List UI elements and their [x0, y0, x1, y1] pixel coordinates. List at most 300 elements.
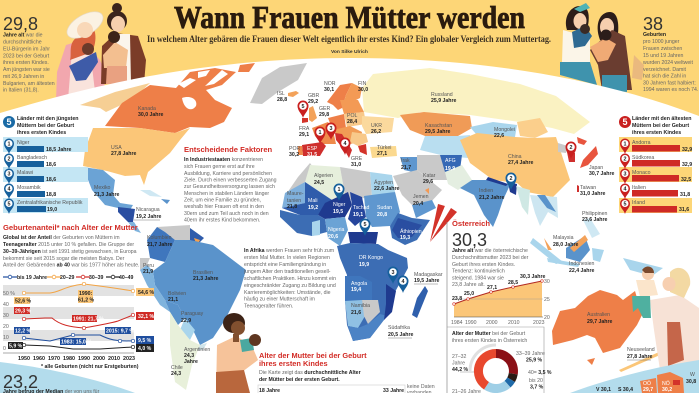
Australia and New Zealand — [552, 290, 660, 372]
heading: map key: der Mütter bei der ersten Geburt. — [259, 377, 340, 383]
map labels: 22,6 — [494, 133, 504, 139]
ranking: oldest mothers: 2 — [624, 156, 626, 162]
map labels: Mongolei — [494, 127, 515, 133]
chart legend: 20–29 — [60, 275, 75, 281]
ranking: oldest mothers: 4 — [624, 186, 626, 192]
ranking: oldest mothers: Monaco — [632, 170, 651, 176]
chart legend: 30–39 — [89, 275, 104, 281]
map labels: Äthiopien — [400, 228, 422, 235]
text block: In Afrika: Teenageralter führen. — [244, 304, 293, 310]
map labels: Chile — [171, 365, 183, 371]
map: Austria on bottom-right arc: 30,2 — [662, 387, 672, 393]
map labels: Japan — [589, 165, 603, 171]
ranking: oldest mothers: 5 — [622, 117, 628, 127]
map labels: 25,9 Jahre — [431, 98, 456, 104]
map labels: Namibia — [351, 303, 370, 309]
line chart: share of births by age: 54,6 % — [138, 290, 155, 296]
text block: Geburtenanteil — [3, 223, 139, 268]
map labels: Türkei — [377, 145, 391, 151]
donut chart box: 3,7 % — [530, 384, 544, 390]
text block: Entscheidende Faktoren: Ausbildung, Karriere und persönlichen — [184, 171, 272, 177]
illustration: two mothers with babies, left — [56, 3, 146, 100]
line chart: share of births by age: 10 — [3, 335, 9, 341]
stat: 38: 1994 waren es noch 74. — [643, 87, 698, 93]
map labels: Algerien — [314, 173, 333, 179]
stat: 29,8: 2023 bei der Geburt — [3, 54, 50, 60]
ranking: oldest mothers: Südkorea — [632, 155, 654, 161]
ranking: youngest mothers: Länder mit den jüngsten — [17, 116, 79, 122]
map: Austria on bottom-right arc: 30,8 — [686, 379, 696, 385]
map legend: keine Daten — [407, 384, 435, 390]
ranking: youngest mothers: 18,8 — [46, 192, 56, 198]
panel: Österreich: Jahre alt war die österreichische — [452, 248, 528, 254]
map labels: ISL — [277, 91, 285, 97]
map labels: 30,7 Jahre — [589, 171, 614, 177]
map labels: Paraguay — [181, 311, 204, 317]
map labels: 27,1 — [377, 151, 387, 157]
area chart: age of Austrian mothers: 28,5 — [508, 280, 518, 286]
text block: Geburtenanteil: 30–39-Jährigen ist seit 1991 stetig gewachsen, in Europa — [3, 249, 137, 255]
map labels: GRE — [351, 156, 363, 162]
map pins: 3 — [330, 126, 332, 132]
text block: Entscheidende Faktoren: Menschen in stabilen Ländern länger — [184, 191, 269, 197]
map labels: Indien — [479, 188, 493, 194]
text block: In Afrika: jungem Alter den traditionellen gesell- — [243, 269, 331, 275]
line chart: share of births by age: 12,2 % — [15, 328, 32, 334]
text block: In Afrika: eingeschränkter Zugang zu Bildung und — [244, 283, 336, 289]
map labels: 30,1 — [324, 87, 334, 93]
ranking: oldest mothers: 32,9 — [682, 162, 692, 168]
map labels: Jemen — [413, 194, 429, 200]
map labels: 19,2 — [308, 205, 318, 211]
stat: 29,8: Bulgarien, am ältesten — [3, 81, 55, 87]
text block: In Afrika — [243, 248, 336, 310]
map labels: 21,2 Jahre — [479, 195, 504, 201]
map: Austria on bottom-right arc: W — [690, 372, 695, 378]
stat: 29,8: Am jüngsten war sie — [3, 67, 50, 73]
stat: 29,8: 29,8 — [3, 14, 38, 34]
line chart: share of births by age: 2010 — [108, 356, 120, 362]
map labels: 27,8 Jahre — [627, 354, 652, 360]
map pins: 2 — [570, 145, 572, 151]
map labels: Angola — [351, 281, 367, 287]
map labels: 24,5 — [314, 180, 324, 186]
text block: Entscheidende Faktoren: zur Gesundheitsversorgung lassen sich — [184, 184, 275, 190]
map labels: 29,6 — [423, 179, 433, 185]
map labels: ESP — [307, 146, 318, 152]
line chart: share of births by age: 2000 — [93, 356, 105, 362]
map labels: Mali — [308, 198, 318, 204]
ranking: youngest mothers: 2 — [8, 156, 10, 162]
map labels: 21,1 — [168, 297, 178, 303]
map labels: POL — [347, 113, 357, 119]
ranking: youngest mothers: 19,0 — [47, 207, 57, 213]
map labels: Südafrika — [388, 325, 410, 331]
map labels: Nicaragua — [136, 207, 160, 213]
map labels: 21,7 — [401, 165, 411, 171]
map labels: 20,5 Jahre — [388, 332, 413, 338]
ranking: youngest mothers — [3, 116, 88, 214]
byline: Von Silke Ulrich — [331, 49, 368, 55]
ranking: oldest mothers: Müttern bei der Geburt — [632, 123, 689, 129]
map labels: Tschad — [353, 205, 370, 211]
text block: Geburtenanteil: Teenageralter 2015 unter 10 % gefallen. Die Gruppe der — [3, 242, 134, 248]
heading: map key: Die Karte zeigt das durchschnittliche Alter — [259, 370, 361, 376]
map labels: 30,0 — [358, 87, 368, 93]
map labels: 22,9 — [181, 318, 191, 324]
bottom left sky arc — [0, 362, 135, 393]
ranking: oldest mothers: 3 — [624, 172, 626, 178]
area chart: age of Austrian mothers: 2010 — [508, 320, 520, 326]
text block: Entscheidende Faktoren: sich Frauen gerne erst auf ihre — [184, 164, 255, 170]
text block: Geburtenanteil: Anteil der Gebärenden ab 40 war bis 1977 höher als heute. — [3, 262, 139, 268]
map labels: Kolumbien — [147, 235, 172, 241]
map labels: 24,3 — [184, 353, 194, 359]
map labels: 28,0 Jahre — [553, 242, 578, 248]
map labels: UKR — [371, 123, 382, 129]
ranking: oldest mothers: 1 — [624, 142, 626, 148]
line chart: share of births by age: 32,1 % — [138, 314, 155, 320]
map labels: GBR — [308, 93, 319, 99]
donut chart box: 33–39 Jahre — [516, 351, 545, 357]
stat: 38 — [643, 14, 698, 93]
text block: Geburtenanteil: Geburtenanteil* nach Alter der Mutter — [3, 223, 138, 232]
map labels: Mexiko — [94, 185, 111, 191]
map pins — [298, 100, 576, 293]
line chart: share of births by age: 30 — [3, 313, 9, 319]
line chart: share of births by age: 5,9 % — [9, 344, 23, 350]
chart legend: 40–49 — [119, 275, 134, 281]
map labels: 21,3 Jahre — [94, 192, 119, 198]
map labels: 19,9 — [359, 262, 369, 268]
donut chart box: ihres ersten Kindes in Österreich — [452, 337, 527, 344]
line chart: share of births by age: 9,5 % — [138, 338, 152, 344]
text block: In Afrika: entspricht eine Familiengründung in — [244, 262, 326, 268]
ranking: youngest mothers: 18,6 — [46, 177, 56, 183]
map: Austria on bottom-right arc: V 30,1 — [596, 387, 611, 393]
line chart: share of births by age: 1990 — [78, 356, 90, 362]
panel: Österreich: Durchschnittsmutter 2023 bei der — [452, 255, 529, 261]
map labels: Kasachstan — [425, 123, 452, 129]
stat: 38: Frauen zwischen — [643, 46, 682, 52]
map legend — [258, 384, 435, 393]
stat: 38: verzeichnet. Damit — [643, 67, 687, 73]
map labels: 26,2 — [371, 129, 381, 135]
text block: Entscheidende Faktoren — [184, 145, 277, 224]
line chart: share of births by age: 1980 — [63, 356, 75, 362]
map labels: 21,8 — [287, 204, 297, 210]
stat: 29,8: durchschnittliche — [3, 40, 42, 46]
map labels: Australien — [587, 312, 610, 318]
map labels: Bolivien — [168, 291, 186, 297]
line chart: share of births by age: 1990: — [79, 291, 93, 297]
panel: Österreich: Österreich — [452, 219, 490, 228]
donut chart box: 44,2 % — [452, 367, 469, 373]
map labels: Madagaskar — [414, 272, 443, 278]
text block: Geburtenanteil: bekommt sie seit 2015 sogar die meisten Babys. Der — [3, 256, 125, 262]
map: Austria on bottom-right arc: NÖ — [662, 380, 670, 387]
ranking: youngest mothers: Malawi — [17, 170, 33, 176]
stat: 38: 30 Jahren fast halbiert: — [643, 80, 696, 86]
map labels: 28,8 — [277, 97, 287, 103]
text block: Entscheidende Faktoren: Zeit, um eine Familie zu gründen, — [184, 198, 261, 204]
map labels: Argentinien — [184, 347, 210, 353]
subtitle: In welchem Alter gebären die Frauen dieser Welt eigentlich ihr erstes Kind? Ein globaler Vergleich zum Muttertag. — [147, 34, 551, 44]
map labels: 31,0 Jahre — [580, 191, 605, 197]
map labels: FIN — [358, 81, 367, 87]
map pins: 5 — [364, 222, 366, 228]
ranking: youngest mothers: Mosambik — [17, 185, 41, 191]
map pins: 2 — [510, 176, 512, 182]
area chart: age of Austrian mothers: 2000 — [486, 320, 498, 326]
area chart: age of Austrian mothers: 23,8 — [452, 296, 462, 302]
ranking: oldest mothers: Italien — [632, 185, 646, 191]
map labels: 31,0 — [351, 162, 361, 168]
ranking: oldest mothers: Irland — [632, 200, 645, 206]
map: Austria on bottom-right arc: S 30,4 — [618, 387, 633, 393]
heading: map key: Alter der Mutter bei der Geburt — [259, 351, 367, 360]
map labels: Irak — [401, 158, 410, 164]
ranking: youngest mothers: Müttern bei der Geburt — [17, 123, 74, 129]
line chart: share of births by age: 2015: 9,7 % — [106, 328, 134, 334]
text block: In Afrika: häufig zu einer Mutterschaft im — [244, 296, 315, 302]
map labels: 19,5 Jahre — [414, 278, 439, 284]
map labels: USA — [111, 145, 122, 151]
ranking: youngest mothers: Bangladesch — [17, 155, 47, 161]
stat: 29,8: in Italien (31,8). — [3, 88, 39, 94]
illustration: mother lifting baby, right — [632, 266, 699, 370]
South America — [140, 225, 246, 390]
map labels: Malaysia — [553, 235, 574, 241]
illustration: two mothers with babies, right — [560, 3, 644, 92]
stat: 29,8: EU-Bürgerin im Jahr — [3, 46, 50, 52]
text block: In Afrika: In Afrika werden Frauen sehr früh zum — [244, 248, 334, 254]
area chart: age of Austrian mothers: 30,3 Jahre — [520, 274, 545, 280]
ranking: youngest mothers: Niger — [17, 140, 30, 146]
map labels: 29,2 — [308, 99, 318, 105]
area chart: age of Austrian mothers: 2023 — [533, 320, 545, 326]
text block: Entscheidende Faktoren: 40ern ihr erstes Kind bekommen. — [184, 218, 260, 224]
stat: 29,8: Jahre alt war die — [3, 32, 43, 38]
map labels: POR — [289, 146, 300, 152]
text block: Entscheidende Faktoren: Entscheidende Faktoren — [184, 145, 273, 154]
map labels: 29,8 — [319, 112, 329, 118]
text block: In Afrika: schaftlichen Praktiken. Hinzu kommt ein — [244, 276, 336, 282]
Africa — [280, 163, 430, 341]
ranking: oldest mothers: Andorra — [632, 140, 651, 146]
map labels: FRA — [299, 126, 310, 132]
map labels: DR Kongo — [359, 255, 383, 261]
map labels: 20,8 — [377, 212, 387, 218]
map pins: 1 — [318, 130, 322, 136]
map labels: 27,8 Jahre — [111, 151, 136, 157]
ranking: oldest mothers: 31,8 — [680, 192, 690, 198]
map labels — [94, 81, 655, 377]
map labels: GER — [319, 106, 330, 112]
map labels: 29,7 Jahre — [587, 319, 612, 325]
text block: Entscheidende Faktoren: Ziele. Durch einen verbesserten Zugang — [184, 178, 277, 184]
area chart: age of Austrian mothers: 30 — [544, 279, 550, 285]
ranking: youngest mothers: 5 — [8, 202, 10, 208]
map labels: 19,5 — [333, 209, 343, 215]
map labels: Niger — [333, 202, 346, 208]
illustration: African mother holding baby — [216, 313, 261, 393]
area chart: age of Austrian mothers: 1990 — [465, 320, 477, 326]
map labels: 20,4 — [413, 201, 423, 207]
donut chart box: 27–32 — [452, 354, 467, 360]
map labels: Sudan — [377, 205, 392, 211]
icon: Austrian flag — [430, 204, 457, 242]
area chart: age of Austrian mothers: 20 — [544, 315, 550, 321]
map labels: Indonesien — [569, 261, 594, 267]
stat: 29,8: mit 26,9 Jahren in — [3, 74, 44, 80]
stat: 23,2: 23,2 — [3, 372, 38, 392]
map labels: AFG — [445, 158, 456, 164]
ranking: oldest mothers: 32,5 — [681, 177, 691, 183]
map pins: 3 — [392, 270, 394, 276]
panel: Österreich: 30,3 — [452, 230, 487, 250]
stat: 23,2 — [3, 372, 100, 393]
donut chart box: 25,9 % — [526, 358, 543, 364]
stat: 38: 15 und 19 Jahren — [643, 53, 683, 59]
ranking: youngest mothers: 3 — [8, 172, 10, 178]
map labels: Katar — [423, 173, 436, 179]
ranking: youngest mothers: Zentralafrikanische Republik — [17, 200, 83, 206]
donut chart box: Alter der Mutter bei der Geburt — [452, 331, 526, 337]
map labels: 20,6 — [328, 234, 338, 240]
line chart: share of births by age: 52,6 % — [15, 298, 32, 304]
map labels: Taiwan — [580, 185, 596, 191]
title: Wann Frauen Mütter werden — [174, 0, 525, 35]
map labels: Nigeria — [328, 227, 345, 233]
panel: Österreich — [447, 219, 552, 393]
panel: Österreich: Tendenz: kontinuierlich — [452, 268, 505, 274]
map labels: 30,0 Jahre — [138, 112, 163, 118]
map labels: 28,4 — [347, 119, 357, 125]
ranking: oldest mothers: 5 — [624, 202, 626, 208]
chart legend — [3, 275, 134, 281]
line chart: share of births by age: 4,0 % — [138, 346, 152, 352]
ranking: youngest mothers: 5 — [6, 117, 12, 127]
text block: Entscheidende Faktoren: In Industriestaaten konzentrieren — [184, 157, 263, 163]
panel: Österreich: 23,8 Jahre alt. — [452, 282, 485, 288]
Europe — [288, 83, 397, 158]
map labels: 27,4 Jahre — [508, 160, 533, 166]
map pins: 1 — [338, 187, 340, 193]
line chart: share of births by age: 50 % — [3, 291, 15, 297]
map labels: 19,1 — [353, 212, 363, 218]
world map — [80, 63, 663, 390]
area chart: age of Austrian mothers: 25,0 — [464, 291, 474, 297]
stat: 29,8 — [3, 14, 55, 94]
map labels: 19,9 — [445, 166, 455, 172]
heading: map key — [259, 351, 367, 383]
donut chart box: bis 20 — [529, 378, 543, 384]
map labels: NOR — [324, 81, 336, 87]
ranking: youngest mothers: 1 — [8, 142, 10, 148]
area chart: age of Austrian mothers: 1984 — [451, 320, 463, 326]
ranking: oldest mothers: Länder mit den ältesten — [632, 116, 691, 122]
map labels: Maure- — [287, 191, 304, 197]
line chart: share of births by age: 1983: 15,0 % — [61, 340, 92, 346]
stat: 38: 38 — [643, 14, 663, 34]
stat: 29,8: ihres ersten Kindes. — [3, 60, 49, 66]
ranking: oldest mothers — [619, 116, 692, 214]
line chart: share of births by age: * alle Geburten (nicht nur Erstgeburten) — [41, 364, 139, 370]
line chart: share of births by age: 61,2 % — [78, 298, 95, 304]
map: Austria on bottom-right arc: OÖ — [643, 380, 651, 387]
line chart: share of births by age: 2023 — [123, 356, 135, 362]
text block: In Afrika: Karrieremöglichkeiten: Umstände, die — [244, 290, 331, 296]
map labels: 21,6 — [351, 310, 361, 316]
ranking: youngest mothers: 18,6 — [46, 162, 56, 168]
map: Austria on bottom-right arc: 29,7 — [643, 387, 653, 393]
map: Austria on bottom-right arc — [570, 360, 699, 393]
stat: 38: hat sich die Zahl in — [643, 74, 686, 80]
ranking: oldest mothers: 32,9 — [682, 147, 692, 153]
stat: 38: wurden 2024 weltweit — [643, 60, 693, 66]
map labels: Peru — [143, 263, 154, 269]
map labels: 29,1 — [299, 132, 309, 138]
stat: 38: Geburten — [643, 32, 666, 38]
line chart: share of births by age: 1960 — [33, 356, 45, 362]
text block: In Afrika: ersten Mal Mutter. In vielen Regionen — [244, 255, 330, 261]
panel: Österreich: steigend. 1984 war sie — [452, 276, 504, 282]
North America — [80, 63, 307, 233]
ranking: youngest mothers: ihres ersten Kindes — [17, 130, 66, 136]
text block: Geburtenanteil: Global ist der Anteil der Geburten von Müttern im — [3, 235, 120, 241]
stat: 38: pro 1000 junger — [643, 39, 680, 45]
map labels: Neuseeland — [627, 347, 655, 353]
map labels: Philippinen — [582, 211, 607, 217]
line chart: share of births by age — [3, 275, 155, 370]
donut chart box: 40= 3,5 % — [528, 370, 552, 376]
map labels: Kanada — [138, 106, 156, 112]
text block: Entscheidende Faktoren: weshalb hier Frauen oft erst in den — [184, 204, 264, 210]
map labels: 22,4 Jahre — [569, 268, 594, 274]
map labels: Brasilien — [193, 270, 213, 276]
line chart: share of births by age: 29,3 % — [15, 308, 32, 314]
map pins: 5 — [302, 104, 304, 110]
map labels: Russland — [431, 92, 453, 98]
ranking: youngest mothers: 4 — [8, 186, 10, 192]
panel: Österreich: Geburt ihres ersten Kindes. — [452, 262, 515, 268]
area chart: age of Austrian mothers: 25 — [544, 297, 550, 303]
area chart: age of Austrian mothers — [451, 274, 550, 326]
line chart: share of births by age: 20 — [3, 324, 9, 330]
map pins: 4 — [402, 279, 404, 285]
map labels: 21,7 Jahre — [147, 242, 172, 248]
line chart: share of births by age: 1950 — [18, 356, 30, 362]
line chart: share of births by age: 1970 — [48, 356, 60, 362]
map labels: 24,3 — [171, 371, 181, 377]
line chart: share of births by age: 0 — [3, 346, 6, 352]
map labels: Ägypten — [374, 179, 393, 186]
ranking: oldest mothers: 31,6 — [679, 207, 689, 213]
map labels: 21,3 Jahre — [193, 276, 218, 282]
donut chart box: Jahre — [452, 360, 465, 366]
donut chart box — [447, 327, 552, 393]
line chart: share of births by age: 1991: 21,7 % — [73, 316, 104, 322]
map labels: 30,2 — [289, 152, 299, 158]
heading: map key: ihres ersten Kindes — [259, 359, 328, 368]
text block: Entscheidende Faktoren: 30ern und zum Teil auch noch in den — [184, 211, 269, 217]
map labels: 21,9 — [143, 269, 153, 275]
chart legend: bis 19 Jahre — [17, 275, 47, 281]
line chart: share of births by age: 40 — [3, 302, 9, 308]
map pins: 4 — [344, 141, 346, 147]
map labels: 19,2 Jahre — [136, 214, 161, 220]
